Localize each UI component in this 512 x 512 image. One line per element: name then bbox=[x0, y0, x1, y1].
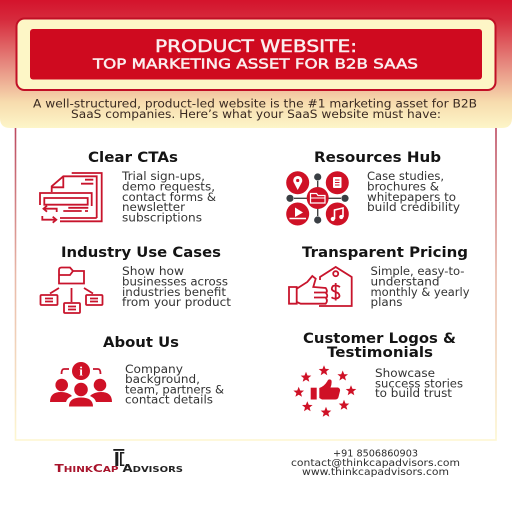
main content panel bbox=[16, 110, 496, 440]
description bbox=[122, 265, 232, 309]
description: Case studies, bbox=[367, 170, 444, 183]
footer contact details: contact@thinkcapadvisors.com bbox=[291, 458, 460, 469]
section: Transparent Pricing bbox=[289, 245, 470, 309]
section: Industry Use Cases bbox=[40, 245, 232, 313]
logo mark bbox=[113, 449, 124, 466]
logo wordmark bbox=[54, 463, 183, 475]
description: Trial sign-ups, bbox=[121, 170, 205, 183]
heading: Resources Hub: Resources Hub bbox=[314, 150, 441, 166]
heading: Customer Logos & Testimonials: Testimonials bbox=[327, 345, 433, 361]
description: monthly & yearly bbox=[370, 286, 470, 299]
description: whitepapers to bbox=[367, 191, 456, 204]
heading: About Us: About Us bbox=[103, 335, 179, 351]
description: contact details bbox=[125, 394, 213, 406]
description: Showcase bbox=[375, 367, 435, 380]
description bbox=[375, 367, 463, 400]
section: Customer Logos and Testimonials bbox=[293, 331, 463, 417]
description: brochures & bbox=[367, 180, 439, 194]
icon: resource network bbox=[286, 171, 349, 226]
description: success stories bbox=[375, 378, 463, 390]
section: Resources Hub bbox=[286, 150, 460, 226]
title banner bbox=[16, 18, 496, 90]
description: businesses across bbox=[122, 276, 228, 288]
heading: Customer Logos & Testimonials: Customer Logos & bbox=[303, 331, 456, 347]
icon: team with info badge bbox=[50, 362, 112, 406]
description: from your product bbox=[122, 296, 232, 309]
description: background, bbox=[125, 373, 200, 386]
section: About Us bbox=[50, 335, 224, 406]
description: plans bbox=[370, 296, 403, 309]
heading: Industry Use Cases: Industry Use Cases bbox=[61, 245, 221, 261]
intro text: A well-structured, product-led website is the #1 marketing asset for B2B bbox=[33, 98, 477, 110]
icon: folder hierarchy bbox=[40, 268, 102, 313]
description bbox=[125, 363, 224, 406]
title line 1: PRODUCT WEBSITE: bbox=[155, 37, 357, 56]
description: Simple, easy-to- bbox=[370, 265, 464, 278]
intro text: SaaS companies. Here’s what your SaaS website must have: bbox=[71, 108, 441, 121]
description: build credibility bbox=[367, 201, 460, 214]
footer contact details: +91 8506860903 bbox=[333, 449, 418, 460]
logo wordmark: A DVISORS bbox=[122, 463, 183, 475]
description: Show how bbox=[122, 265, 184, 278]
icon: thumb and price tag bbox=[289, 267, 352, 306]
description: Company bbox=[125, 363, 183, 376]
intro text bbox=[33, 98, 477, 121]
header background bbox=[0, 0, 512, 128]
footer contact details: www.thinkcapadvisors.com bbox=[302, 467, 449, 478]
heading: Transparent Pricing: Transparent Pricing bbox=[302, 245, 468, 261]
description bbox=[367, 170, 460, 214]
description bbox=[121, 170, 216, 224]
heading: Customer Logos & Testimonials bbox=[303, 331, 456, 361]
description: contact forms & bbox=[122, 191, 216, 204]
description: to build trust bbox=[375, 387, 453, 400]
description: newsletter bbox=[122, 201, 185, 214]
icon: team with info badge: i bbox=[79, 364, 83, 378]
title line 2: TOP MARKETING ASSET FOR B2B SAAS bbox=[92, 56, 418, 72]
icon: thumbs up with stars bbox=[293, 365, 356, 417]
footer contact details bbox=[291, 449, 460, 478]
description: industries benefit bbox=[122, 286, 227, 299]
description: subscriptions bbox=[122, 212, 202, 224]
heading: Clear CTAs: Clear CTAs bbox=[88, 150, 178, 166]
description: demo requests, bbox=[122, 180, 215, 194]
logo wordmark: T HINK C AP bbox=[54, 463, 119, 475]
icon: documents and arrows bbox=[40, 173, 102, 223]
description bbox=[370, 265, 470, 309]
description: understand bbox=[370, 276, 440, 288]
section: Clear CTAs bbox=[40, 150, 216, 224]
footer logo: ThinkCap Advisors bbox=[54, 449, 183, 475]
description: team, partners & bbox=[125, 384, 224, 396]
